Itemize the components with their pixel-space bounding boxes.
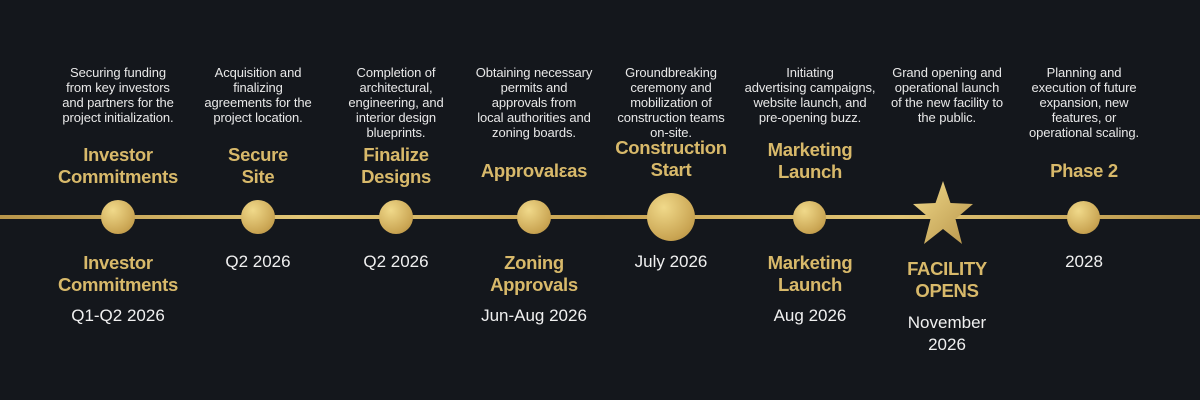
text: 2026	[928, 335, 966, 354]
text: construction teams	[617, 110, 725, 125]
text: Q2 2026	[363, 252, 429, 271]
text: architectural,	[359, 80, 433, 95]
text: agreements for the	[204, 95, 312, 110]
text: advertising campaigns,	[745, 80, 875, 95]
text: and partners for the	[62, 95, 174, 110]
milestone 8: phase 2	[1029, 65, 1139, 271]
text: Planning and	[1047, 65, 1121, 80]
text: Marketing	[768, 139, 852, 160]
text: website launch, and	[753, 95, 866, 110]
text: Initiating	[786, 65, 834, 80]
text: Completion of	[357, 65, 435, 80]
milestone 3: finalize designs	[348, 65, 444, 271]
text: November	[908, 313, 986, 332]
text: July 2026	[635, 252, 707, 271]
text: operational launch	[895, 80, 999, 95]
text: from key investors	[66, 80, 170, 95]
milestone 5: construction start	[615, 65, 727, 271]
text: Marketing	[768, 252, 852, 273]
text: Commitments	[58, 274, 178, 295]
milestone 6: marketing launch	[745, 65, 875, 325]
text: FACILITY	[907, 258, 987, 279]
text: OPENS	[915, 280, 979, 301]
text: Q2 2026	[225, 252, 291, 271]
text: the public.	[918, 110, 976, 125]
milestone 7: facility opens (star)	[891, 65, 1003, 354]
text: Construction	[615, 137, 727, 158]
timeline line	[0, 215, 1200, 219]
text: Obtaining necessary	[476, 65, 592, 80]
text: interior design	[356, 110, 436, 125]
text: on-site.	[650, 125, 692, 140]
milestone 4: approvals	[476, 65, 592, 325]
text: Q1-Q2 2026	[71, 306, 165, 325]
text: Finalize	[363, 144, 429, 165]
text: Grand opening and	[892, 65, 1002, 80]
text: local authorities and	[477, 110, 591, 125]
text: Start	[651, 159, 691, 180]
text: ceremony and	[630, 80, 712, 95]
text: operational scaling.	[1029, 125, 1139, 140]
text: project initialization.	[62, 110, 174, 125]
text: Launch	[778, 161, 842, 182]
text: execution of future	[1031, 80, 1137, 95]
text: Approvals	[490, 274, 578, 295]
text: Launch	[778, 274, 842, 295]
milestone 1: investor commitments	[58, 65, 178, 325]
milestone 2: secure site	[204, 65, 312, 271]
text: permits and	[501, 80, 567, 95]
text: zoning boards.	[492, 125, 576, 140]
text: Approvalεas	[481, 160, 587, 181]
text: Investor	[83, 252, 153, 273]
text: features, or	[1052, 110, 1116, 125]
text: finalizing	[233, 80, 283, 95]
text: Acquisition and	[215, 65, 301, 80]
text: Aug 2026	[774, 306, 846, 325]
text: pre-opening buzz.	[759, 110, 861, 125]
text: mobilization of	[630, 95, 712, 110]
text: Jun-Aug 2026	[481, 306, 587, 325]
text: Securing funding	[70, 65, 166, 80]
text: 2028	[1065, 252, 1103, 271]
text: blueprints.	[367, 125, 425, 140]
text: Site	[242, 166, 274, 187]
text: project location.	[213, 110, 303, 125]
text: approvals from	[492, 95, 576, 110]
text: Phase 2	[1050, 160, 1118, 181]
text: engineering, and	[348, 95, 444, 110]
text: Investor	[83, 144, 153, 165]
text: Secure	[228, 144, 288, 165]
text: Commitments	[58, 166, 178, 187]
text: Zoning	[504, 252, 564, 273]
text: Designs	[361, 166, 431, 187]
text: expansion, new	[1040, 95, 1128, 110]
text: Groundbreaking	[625, 65, 717, 80]
text: of the new facility to	[891, 95, 1003, 110]
